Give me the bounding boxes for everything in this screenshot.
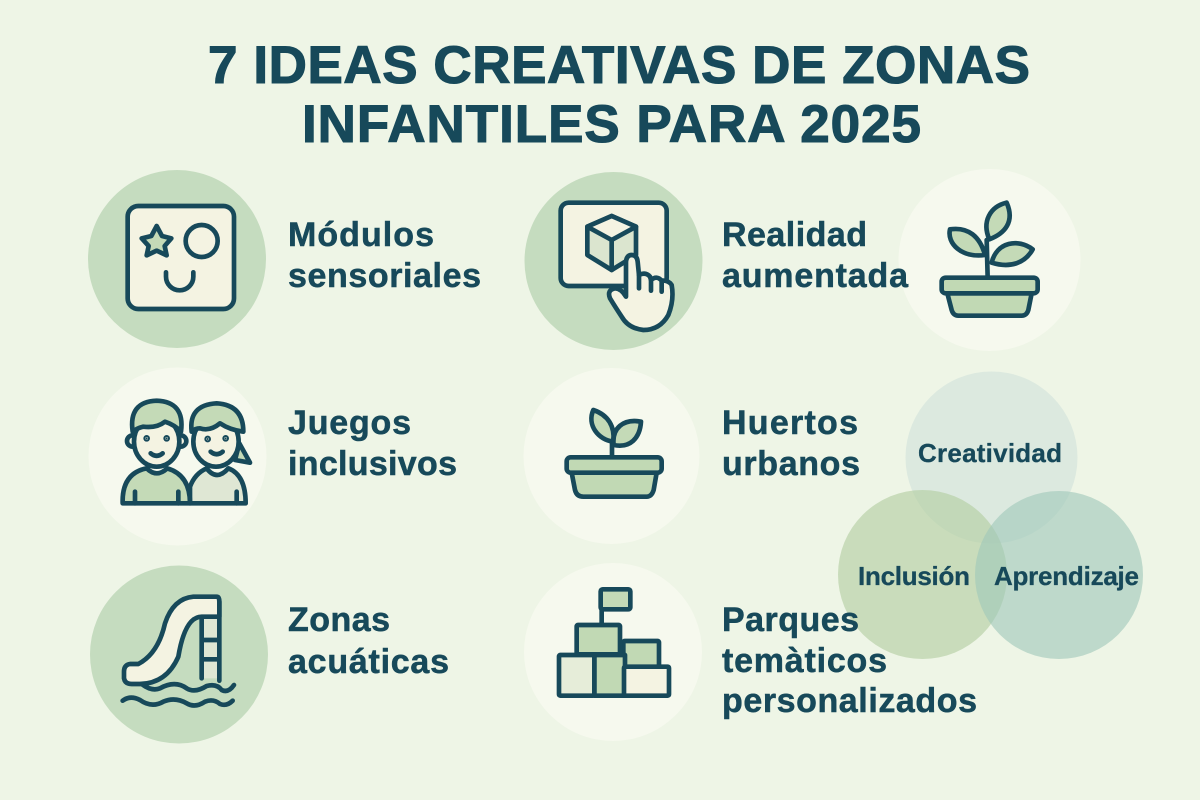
item: módulos sensoriales — [88, 170, 481, 348]
icon: water slide and waves — [90, 566, 268, 744]
title: INFANTILES PARA 2025 — [302, 95, 921, 154]
label — [722, 216, 909, 295]
label: Realidad — [722, 216, 867, 254]
label: aumentada — [722, 257, 909, 295]
venn diagram: creatividad, inclusión, aprendizaje — [838, 372, 1143, 659]
label — [722, 601, 977, 720]
label: inclusivos — [288, 445, 457, 483]
icon: planter with sprout — [524, 368, 700, 544]
icon: potted plant with three leaves — [898, 169, 1080, 351]
item: zonas acuáticas — [90, 566, 449, 744]
label: Juegos — [288, 404, 411, 442]
label: Huertos — [722, 404, 858, 442]
label: acuáticas — [288, 643, 449, 681]
label: sensoriales — [288, 257, 481, 295]
label: urbanos — [722, 445, 860, 483]
item: realidad aumentada — [524, 172, 909, 350]
label: Módulos — [288, 216, 434, 254]
icon: two children — [88, 368, 266, 546]
title — [208, 36, 1030, 154]
label — [288, 601, 449, 681]
item: juegos inclusivos — [88, 368, 457, 546]
label — [722, 404, 860, 483]
label: temàticos — [722, 642, 887, 680]
venn diagram: creatividad, inclusión, aprendizaje: Inclusión — [858, 561, 970, 591]
icon: sensory module — [88, 170, 266, 348]
icon: blocks with flag — [524, 563, 702, 741]
icon: augmented reality cube and hand — [524, 172, 702, 350]
label: Zonas — [288, 601, 390, 639]
title: 7 IDEAS CREATIVAS DE ZONAS — [208, 36, 1030, 95]
label: Parques — [722, 601, 859, 639]
venn diagram: creatividad, inclusión, aprendizaje: Aprendizaje — [994, 561, 1139, 591]
label — [288, 404, 457, 483]
item: parques temáticos personalizados — [524, 563, 977, 741]
label: personalizados — [722, 682, 977, 720]
venn diagram: creatividad, inclusión, aprendizaje: Creatividad — [918, 438, 1062, 468]
label — [288, 216, 481, 295]
item: huertos urbanos — [524, 368, 860, 544]
